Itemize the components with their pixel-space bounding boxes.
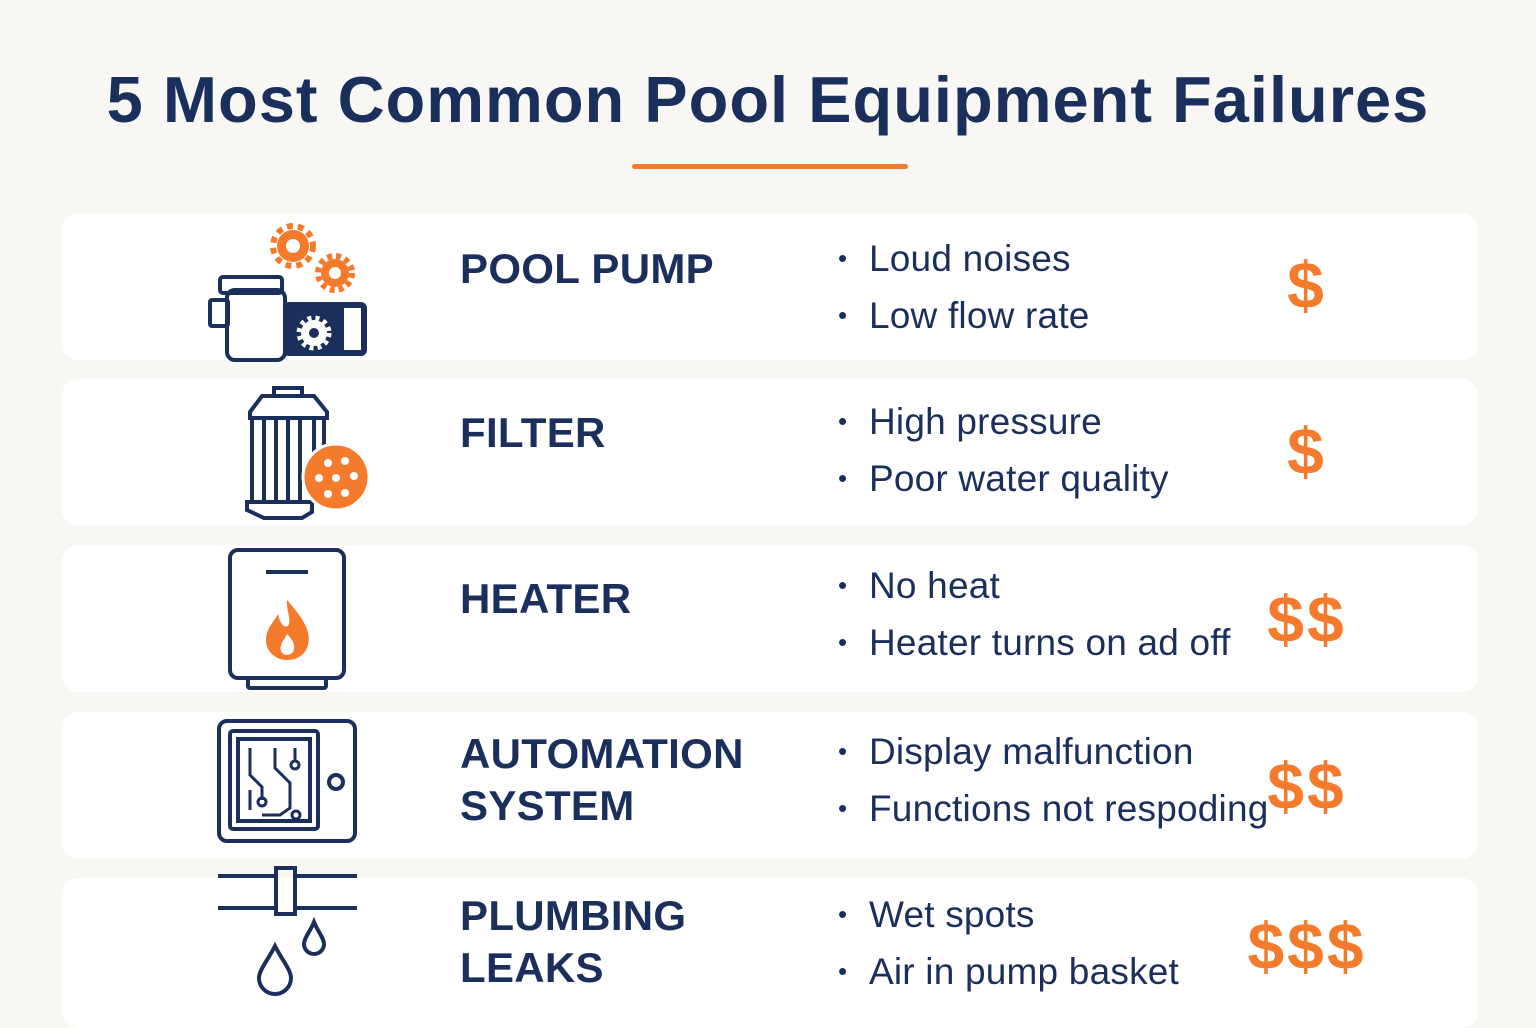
bullets: pump: Loud noises bbox=[869, 238, 1071, 279]
heading: pool pump: POOL PUMP bbox=[460, 245, 714, 292]
heading: automation system bbox=[460, 730, 744, 829]
icon: pump bbox=[208, 223, 367, 362]
title: 5 Most Common Pool Equipment Failures bbox=[107, 63, 1429, 136]
icon: heater bbox=[228, 548, 346, 690]
bullets: heater bbox=[839, 565, 1231, 663]
bullets: heater: No heat bbox=[869, 565, 1000, 606]
heading: plumbing leaks: LEAKS bbox=[460, 944, 604, 991]
bullets: plumbing: Wet spots bbox=[869, 894, 1035, 935]
bullets: plumbing bbox=[839, 894, 1179, 992]
cost: $: $ bbox=[1287, 248, 1327, 322]
heading: automation system: AUTOMATION bbox=[460, 730, 744, 777]
title underline bbox=[632, 164, 908, 169]
bullets: pump bbox=[839, 238, 1090, 336]
cost: $: $ bbox=[1287, 414, 1327, 488]
icon: automation panel bbox=[217, 719, 357, 843]
cost: $$: $$ bbox=[1267, 582, 1347, 656]
panel: pool pump bbox=[62, 213, 1478, 360]
bullets: automation bbox=[839, 731, 1269, 829]
heading: heater: HEATER bbox=[460, 575, 631, 622]
panel: plumbing leaks bbox=[62, 878, 1478, 1028]
heading: automation system: SYSTEM bbox=[460, 782, 634, 829]
cost: $$: $$ bbox=[1267, 749, 1347, 823]
bullets: filter bbox=[839, 401, 1169, 499]
heading: plumbing leaks bbox=[460, 892, 686, 991]
heading: plumbing leaks: PLUMBING bbox=[460, 892, 686, 939]
bullets: automation: Functions not respoding bbox=[869, 788, 1269, 829]
bullets: plumbing: Air in pump basket bbox=[869, 951, 1179, 992]
bullets: filter: Poor water quality bbox=[869, 458, 1169, 499]
bullets: filter: High pressure bbox=[869, 401, 1102, 442]
panel: automation bbox=[62, 712, 1478, 859]
bullets: automation: Display malfunction bbox=[869, 731, 1194, 772]
panel: heater bbox=[62, 545, 1478, 692]
icon: filter bbox=[245, 386, 368, 520]
bullets: heater: Heater turns on ad off bbox=[869, 622, 1231, 663]
cost: $$$: $$$ bbox=[1247, 909, 1367, 983]
bullets: pump: Low flow rate bbox=[869, 295, 1090, 336]
heading: filter: FILTER bbox=[460, 409, 606, 456]
panel: filter bbox=[62, 379, 1478, 526]
icon: leaking pipe bbox=[218, 866, 357, 996]
